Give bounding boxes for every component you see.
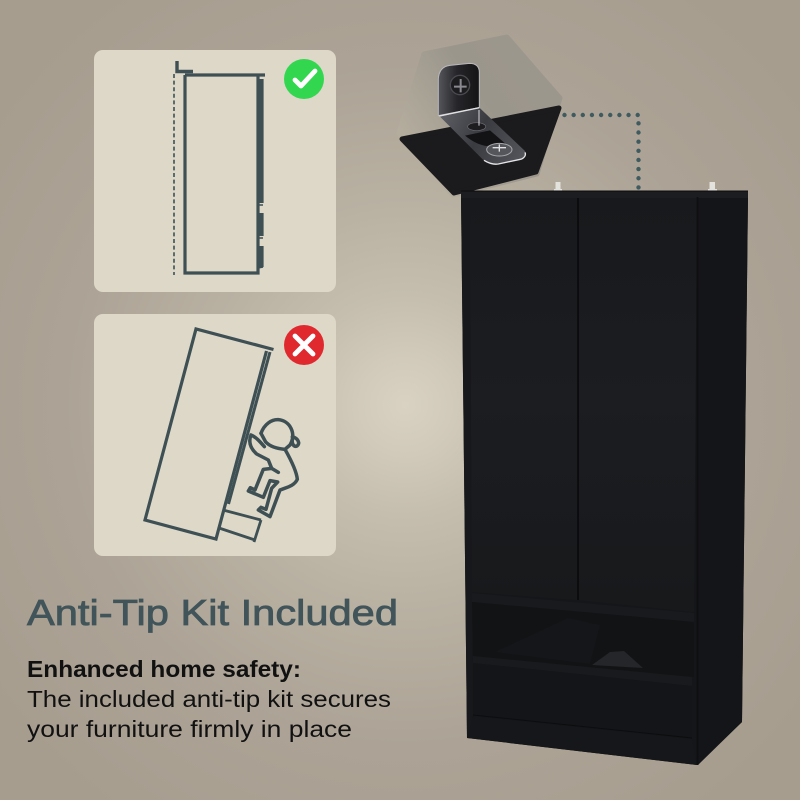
text block: safety description: [27, 656, 391, 742]
icon: tipping wardrobe: [145, 329, 274, 542]
title: Anti-Tip Kit Included: [27, 592, 398, 633]
door right edge: [696, 197, 698, 765]
plinth: [467, 716, 697, 765]
left door: [470, 198, 578, 600]
wardrobe body: [461, 191, 748, 765]
icon: metal L bracket with screws: [438, 63, 526, 165]
hexagon furniture top: [402, 108, 559, 193]
panel background: [94, 50, 336, 292]
callout: anti-tip bracket hexagon: [399, 37, 560, 195]
icon: red cross badge: [284, 325, 324, 365]
lower drawer: [473, 663, 692, 738]
right door: [579, 198, 697, 612]
top band: [461, 191, 748, 198]
icon: wardrobe with doors and drawers: [461, 182, 748, 765]
drawer rail one: [472, 593, 694, 622]
panel background: [94, 314, 336, 556]
door split: [577, 198, 579, 600]
panel: tipping wardrobe warning: [94, 314, 336, 556]
upper drawer: [472, 602, 694, 677]
panel: correct anchored wardrobe: [94, 50, 336, 292]
left frame: [461, 198, 473, 738]
side panel: [698, 198, 748, 765]
hexagon wall: [399, 37, 560, 195]
arrow: dotted connector from bracket to wardrobe top: [564, 115, 638, 188]
text block: safety description: Enhanced home safety:: [27, 656, 301, 682]
icon: wardrobe anchored to wall: [174, 61, 265, 275]
icon: climbing child: [248, 420, 299, 517]
drawer reflection: [495, 618, 600, 664]
icon: green check badge: [284, 59, 324, 99]
text block: safety description: The included anti-tip kit secures: [27, 686, 391, 712]
small top brackets: [554, 182, 717, 191]
drawer rail two: [473, 656, 692, 686]
text block: safety description: your furniture firmly in place: [27, 716, 352, 742]
